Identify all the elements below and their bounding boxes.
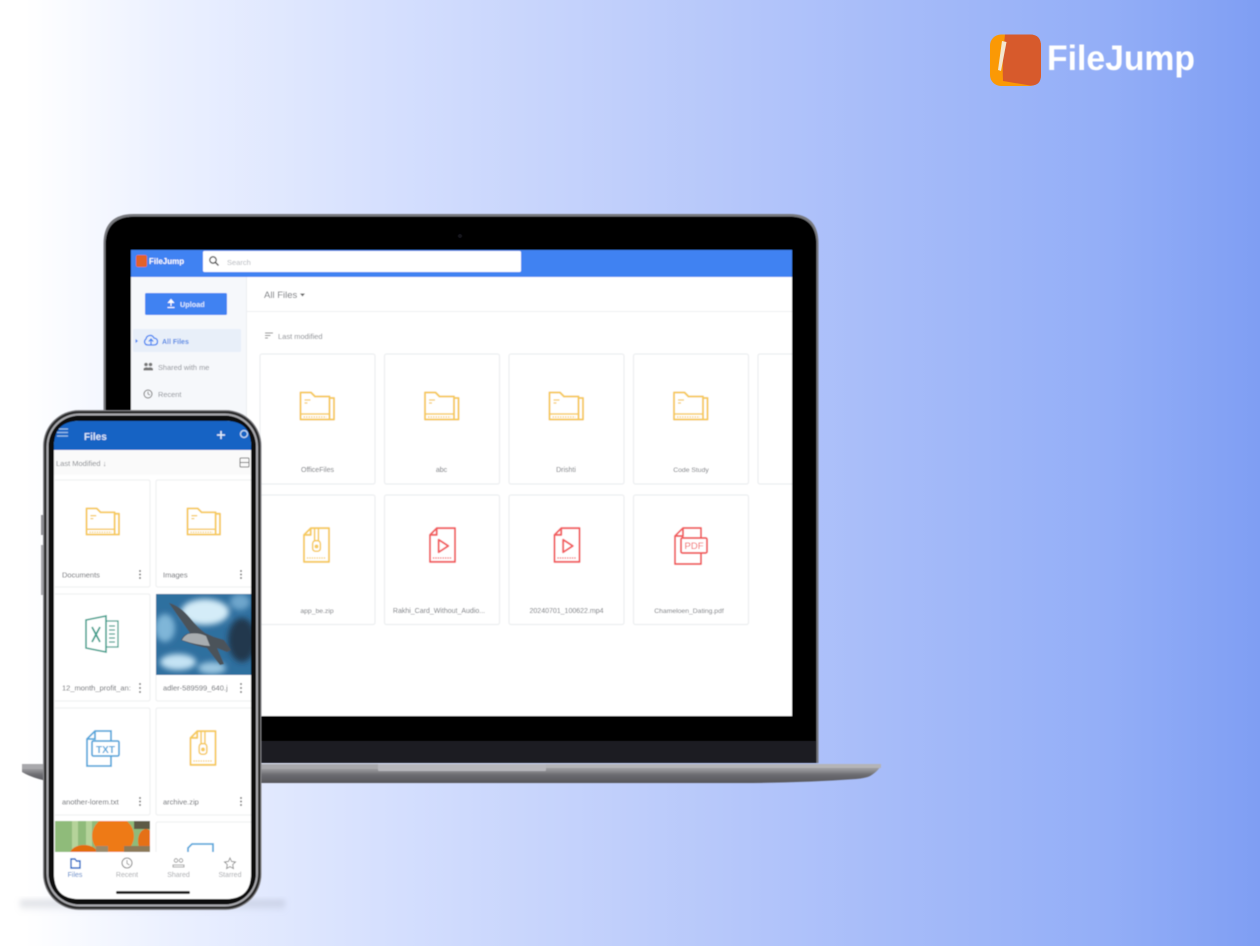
icon: folder Documents bbox=[87, 508, 119, 535]
icon: folder Drishti bbox=[550, 392, 583, 420]
file cards bbox=[260, 354, 792, 624]
phone sort row bbox=[54, 450, 251, 475]
sort label: Last modified bbox=[278, 332, 323, 341]
sidebar bbox=[131, 277, 247, 716]
search box: Search bbox=[227, 258, 251, 267]
image: pumpkin photo bbox=[54, 820, 151, 853]
nav: recent: Recent bbox=[158, 390, 181, 399]
phone file names bbox=[62, 570, 228, 806]
tab: starred: Starred bbox=[219, 872, 242, 879]
file names: Chameloen_Dating.pdf bbox=[654, 608, 724, 615]
phone file names: adler-589599_640.j bbox=[163, 684, 228, 692]
icon: partial file bbox=[188, 844, 213, 852]
phone file names: archive.zip bbox=[163, 798, 199, 806]
file names bbox=[300, 467, 724, 615]
icon: folder logo bbox=[990, 34, 1041, 86]
home indicator bbox=[116, 891, 190, 894]
phone bbox=[41, 410, 262, 910]
image: bird photo bbox=[155, 594, 256, 675]
nav: recent bbox=[144, 390, 181, 399]
upload button: Upload bbox=[180, 300, 205, 309]
icon: PDF file: PDF bbox=[684, 541, 704, 552]
logo wordmark: FileJump bbox=[1047, 39, 1195, 78]
laptop base bbox=[22, 764, 881, 783]
file names: app_be.zip bbox=[300, 608, 334, 615]
phone shadow bbox=[20, 900, 285, 912]
file names: Drishti bbox=[556, 467, 576, 474]
tab: recent: Recent bbox=[116, 872, 138, 879]
phone body bbox=[41, 410, 262, 910]
icon: folder Images bbox=[188, 508, 220, 535]
phone sort row: Last Modified ↓ bbox=[56, 459, 106, 468]
tab: files: Files bbox=[68, 872, 83, 879]
tab: recent bbox=[116, 858, 138, 879]
icon: excel file bbox=[86, 616, 118, 652]
file names: Rakhi_Card_Without_Audio... bbox=[393, 608, 485, 615]
icon: folder OfficeFiles bbox=[300, 392, 334, 420]
file names: OfficeFiles bbox=[301, 467, 334, 474]
phone tab bar bbox=[54, 852, 251, 899]
icon: TXT file: TXT bbox=[96, 745, 115, 756]
nav: shared with me: Shared with me bbox=[158, 363, 209, 372]
icon: zip archive bbox=[190, 731, 216, 765]
file names: abc bbox=[436, 467, 448, 474]
icon: video Rakhi card bbox=[430, 528, 455, 562]
file names: Code Study bbox=[673, 467, 709, 474]
app top bar: FileJump bbox=[149, 257, 184, 266]
phone file names: Images bbox=[163, 570, 188, 580]
icon: folder abc bbox=[425, 392, 458, 420]
icon: zip app_be bbox=[304, 528, 329, 562]
phone file names: Documents bbox=[62, 570, 100, 580]
nav: all files bbox=[133, 329, 241, 352]
file names: 20240701_100622.mp4 bbox=[530, 608, 604, 615]
app top bar bbox=[131, 250, 792, 277]
laptop bbox=[22, 214, 881, 783]
upload button bbox=[145, 293, 227, 315]
all files header: All Files bbox=[264, 290, 298, 301]
search box bbox=[203, 251, 521, 272]
icon: TXT file bbox=[87, 731, 119, 766]
icon: PDF file bbox=[675, 528, 707, 564]
tab: shared: Shared bbox=[167, 872, 190, 879]
nav: all files: All Files bbox=[162, 339, 189, 346]
phone header bar: Files bbox=[84, 432, 107, 443]
tab: shared bbox=[167, 859, 190, 879]
phone header bar bbox=[54, 421, 251, 450]
laptop screen bbox=[131, 250, 792, 716]
phone file names: another-lorem.txt bbox=[62, 798, 120, 806]
phone file names: 12_month_profit_an: bbox=[62, 684, 131, 692]
laptop lid bbox=[104, 214, 818, 763]
phone cards bbox=[55, 480, 251, 860]
tab: starred bbox=[219, 858, 242, 879]
all files header bbox=[247, 290, 792, 312]
tab: files bbox=[68, 859, 83, 879]
icon: video 20240701 bbox=[554, 528, 580, 562]
logo: FileJump bbox=[990, 34, 1195, 86]
phone menu dots bbox=[139, 570, 242, 806]
icon: folder Code Study bbox=[674, 392, 708, 420]
